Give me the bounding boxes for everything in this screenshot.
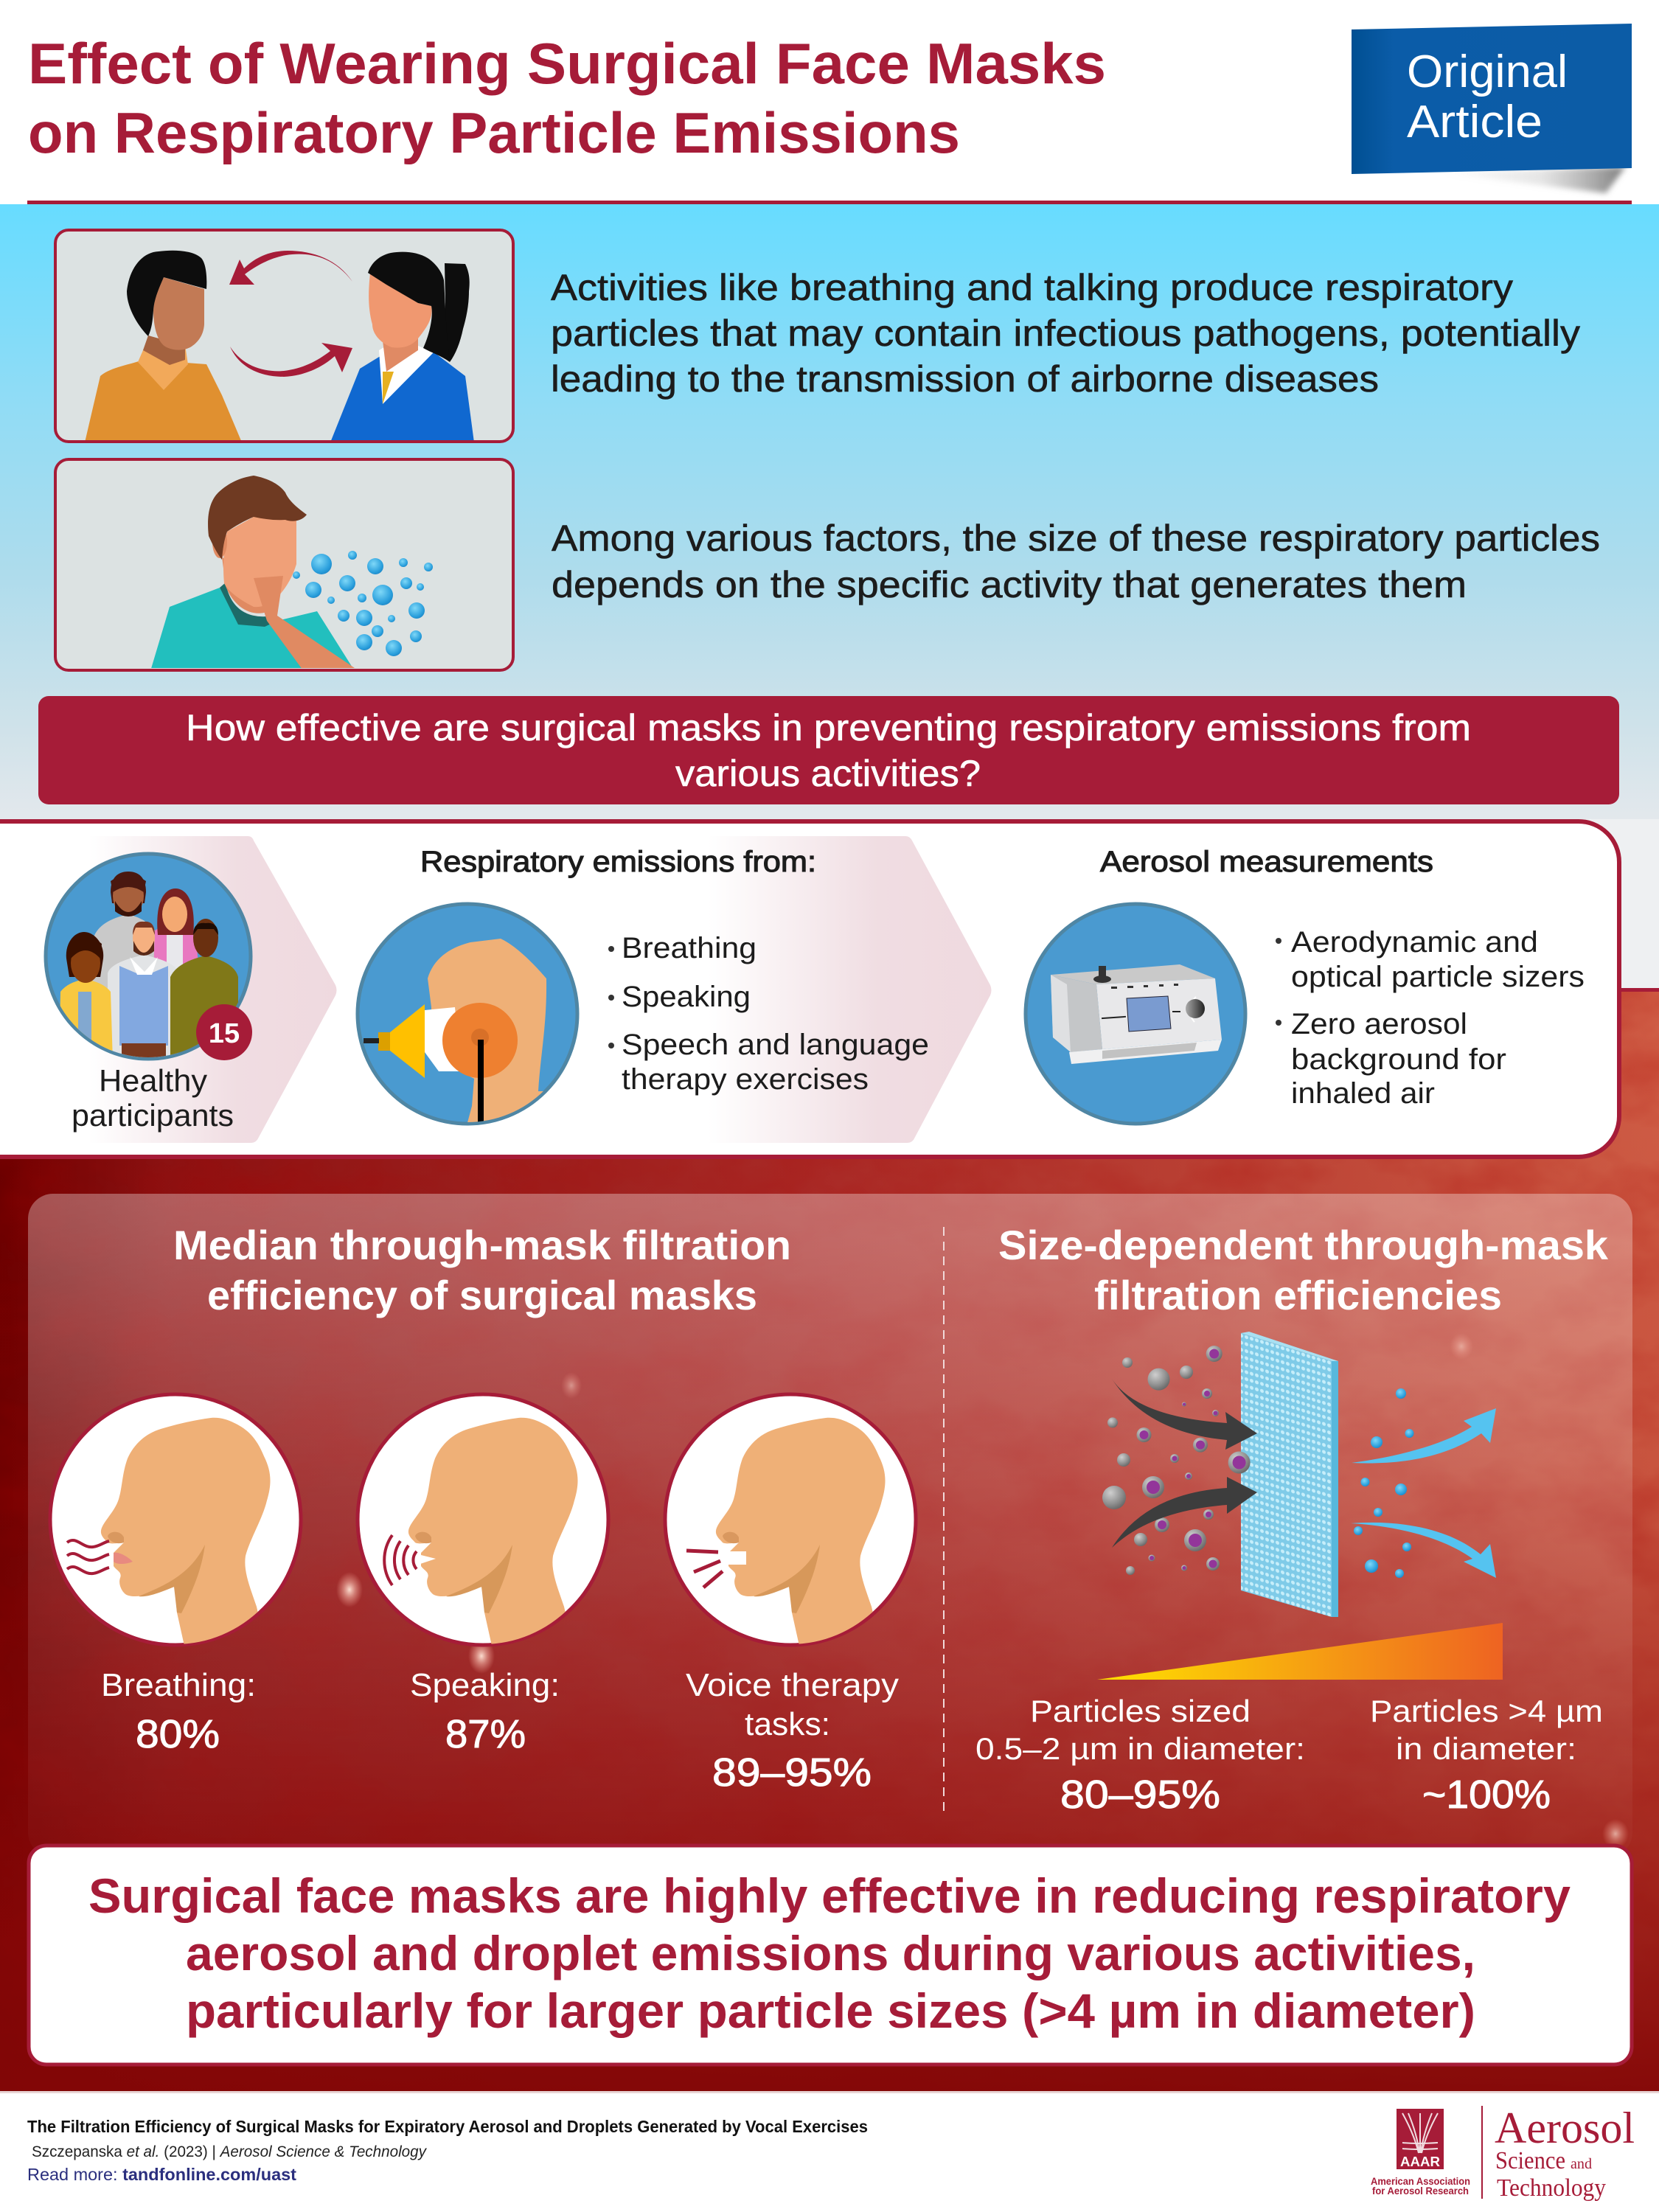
- badge: participant count: 15: [209, 1018, 240, 1049]
- particles: after filter: [1354, 1388, 1414, 1578]
- logo: journal name: Science: [1495, 2147, 1565, 2174]
- badge: original article: Article: [1407, 97, 1543, 147]
- list: emission activities: Speech and language: [622, 1029, 929, 1061]
- heading: size-dependent efficiency: [998, 1222, 1609, 1318]
- arrow: outgoing upper: [1352, 1408, 1496, 1464]
- conclusion box: particularly for larger particle sizes (>4 µm in diameter): [186, 1983, 1475, 2038]
- footer citation: The Filtration Efficiency of Surgical Masks for Expiratory Aerosol and Droplets Generated by Vocal Exercises: [27, 2117, 868, 2136]
- text block: particle size: [552, 518, 1600, 605]
- stat: small particles: Particles sized: [1030, 1694, 1251, 1728]
- text block: particle size: Among various factors, the size of these respiratory particles: [552, 518, 1600, 559]
- label: healthy participants: participants: [72, 1098, 234, 1133]
- stat: breathing: [101, 1667, 256, 1756]
- stat: large particles: in diameter:: [1396, 1731, 1576, 1766]
- stat: voice therapy: Voice therapy: [686, 1667, 899, 1703]
- list: emission activities: Speaking: [622, 981, 751, 1013]
- logo: journal name: Technology: [1497, 2174, 1606, 2202]
- logo: AAAR: for Aerosol Research: [1372, 2185, 1469, 2197]
- chevron one: [88, 836, 336, 1143]
- heading: size-dependent efficiency: filtration efficiencies: [1094, 1272, 1502, 1318]
- icon: droplets: [293, 551, 433, 656]
- text block: activities: [551, 267, 1580, 400]
- list: measurement details: background for: [1291, 1043, 1506, 1076]
- icon: conversation arrows: [229, 251, 352, 377]
- panel: study design: [0, 821, 1619, 1157]
- stat: speaking: 87%: [445, 1712, 526, 1756]
- label: healthy participants: Healthy: [99, 1063, 207, 1098]
- list: measurement details: inhaled air: [1291, 1077, 1435, 1110]
- arrow: outgoing lower: [1351, 1523, 1496, 1578]
- list: measurement details: Aerodynamic and: [1291, 926, 1538, 959]
- particles: before filter: [1102, 1346, 1251, 1575]
- panel: results: [28, 1194, 1632, 1857]
- question banner: [38, 696, 1619, 804]
- footer citation: [27, 2117, 868, 2184]
- text block: activities: particles that may contain infectious pathogens, potentially: [551, 313, 1580, 354]
- stat: small particles: 0.5–2 µm in diameter:: [975, 1731, 1305, 1766]
- question banner: various activities?: [675, 753, 981, 794]
- stat: large particles: ~100%: [1422, 1773, 1551, 1817]
- stat: breathing: 80%: [136, 1712, 220, 1756]
- diagram: mask filter: [1097, 1332, 1503, 1680]
- stat: large particles: Particles >4 µm: [1370, 1694, 1603, 1728]
- list: emission activities: Breathing: [622, 932, 757, 964]
- heading: aerosol measurements: Aerosol measurements: [1100, 846, 1433, 878]
- badge: original article: Original: [1407, 46, 1568, 97]
- footer citation: Read more: tandfonline.com/uast: [27, 2165, 296, 2184]
- icon: speaking face: [358, 1394, 608, 1646]
- heading: median filtration efficiency: Median through-mask filtration: [173, 1222, 791, 1268]
- icon: woman: [330, 252, 474, 442]
- footer citation: Szczepanska et al. (2023) | Aerosol Science & Technology: [32, 2143, 427, 2160]
- stat: small particles: 80–95%: [1060, 1773, 1220, 1817]
- icon: voice therapy face: [665, 1394, 916, 1646]
- logo: AAAR: [1371, 2109, 1470, 2197]
- chevron two: [708, 836, 991, 1143]
- label: healthy participants: [72, 1063, 234, 1133]
- stat: voice therapy: 89–95%: [712, 1750, 872, 1795]
- text block: particle size: depends on the specific activity that generates them: [552, 564, 1467, 605]
- panel: man coughing illustration: [55, 459, 513, 672]
- stat: breathing: Breathing:: [101, 1667, 256, 1703]
- stat: small particles: [975, 1694, 1305, 1817]
- logo: journal name: and: [1571, 2156, 1592, 2172]
- icon: group of participants: [46, 854, 252, 1065]
- wedge: increasing particle size: [1097, 1623, 1503, 1680]
- stat: voice therapy: tasks:: [745, 1706, 830, 1742]
- conclusion box: aerosol and droplet emissions during various activities,: [186, 1926, 1475, 1980]
- logo: journal name: [1495, 2104, 1635, 2202]
- title: [28, 31, 1106, 165]
- list: measurement details: [1276, 926, 1585, 1110]
- icon: man: [85, 251, 242, 442]
- conclusion box: [29, 1846, 1632, 2065]
- stat: speaking: [410, 1667, 560, 1756]
- icon: head with mask sampler: [358, 904, 577, 1128]
- list: emission activities: therapy exercises: [622, 1063, 869, 1096]
- text block: activities: leading to the transmission of airborne diseases: [551, 358, 1379, 400]
- question banner: How effective are surgical masks in preventing respiratory emissions from: [186, 707, 1471, 748]
- title: Effect of Wearing Surgical Face Masks: [28, 31, 1106, 96]
- panel: two people illustration: [55, 230, 513, 442]
- heading: median filtration efficiency: efficiency of surgical masks: [207, 1272, 757, 1318]
- logo: AAAR: American Association: [1371, 2175, 1470, 2187]
- arrow: incoming lower: [1112, 1477, 1257, 1548]
- stat: large particles: [1370, 1694, 1603, 1817]
- filter sheet: [1241, 1332, 1338, 1617]
- stat: voice therapy: [686, 1667, 899, 1795]
- icon: man with teal shirt: [150, 476, 355, 672]
- icon: particle sizer instrument: [1026, 904, 1245, 1124]
- list: measurement details: Zero aerosol: [1291, 1008, 1467, 1040]
- icon: breathing face: [50, 1394, 301, 1646]
- badge: original article: [1352, 24, 1632, 193]
- conclusion box: Surgical face masks are highly effective in reducing respiratory: [88, 1868, 1571, 1923]
- logo: journal name: Aerosol: [1495, 2104, 1635, 2152]
- badge: participant count: [196, 1004, 252, 1060]
- text block: activities: Activities like breathing and talking produce respiratory: [551, 267, 1513, 308]
- heading: median filtration efficiency: [173, 1222, 791, 1318]
- list: measurement details: optical particle sizers: [1291, 961, 1585, 993]
- heading: size-dependent efficiency: Size-dependent through-mask: [998, 1222, 1609, 1268]
- heading: respiratory emissions: Respiratory emissions from:: [420, 846, 816, 878]
- stat: speaking: Speaking:: [410, 1667, 560, 1703]
- title: on Respiratory Particle Emissions: [28, 100, 960, 165]
- list: emission activities: [608, 932, 929, 1096]
- logo: AAAR: AAAR: [1400, 2154, 1440, 2169]
- arrow: incoming upper: [1112, 1379, 1257, 1450]
- header rule: [27, 201, 1632, 204]
